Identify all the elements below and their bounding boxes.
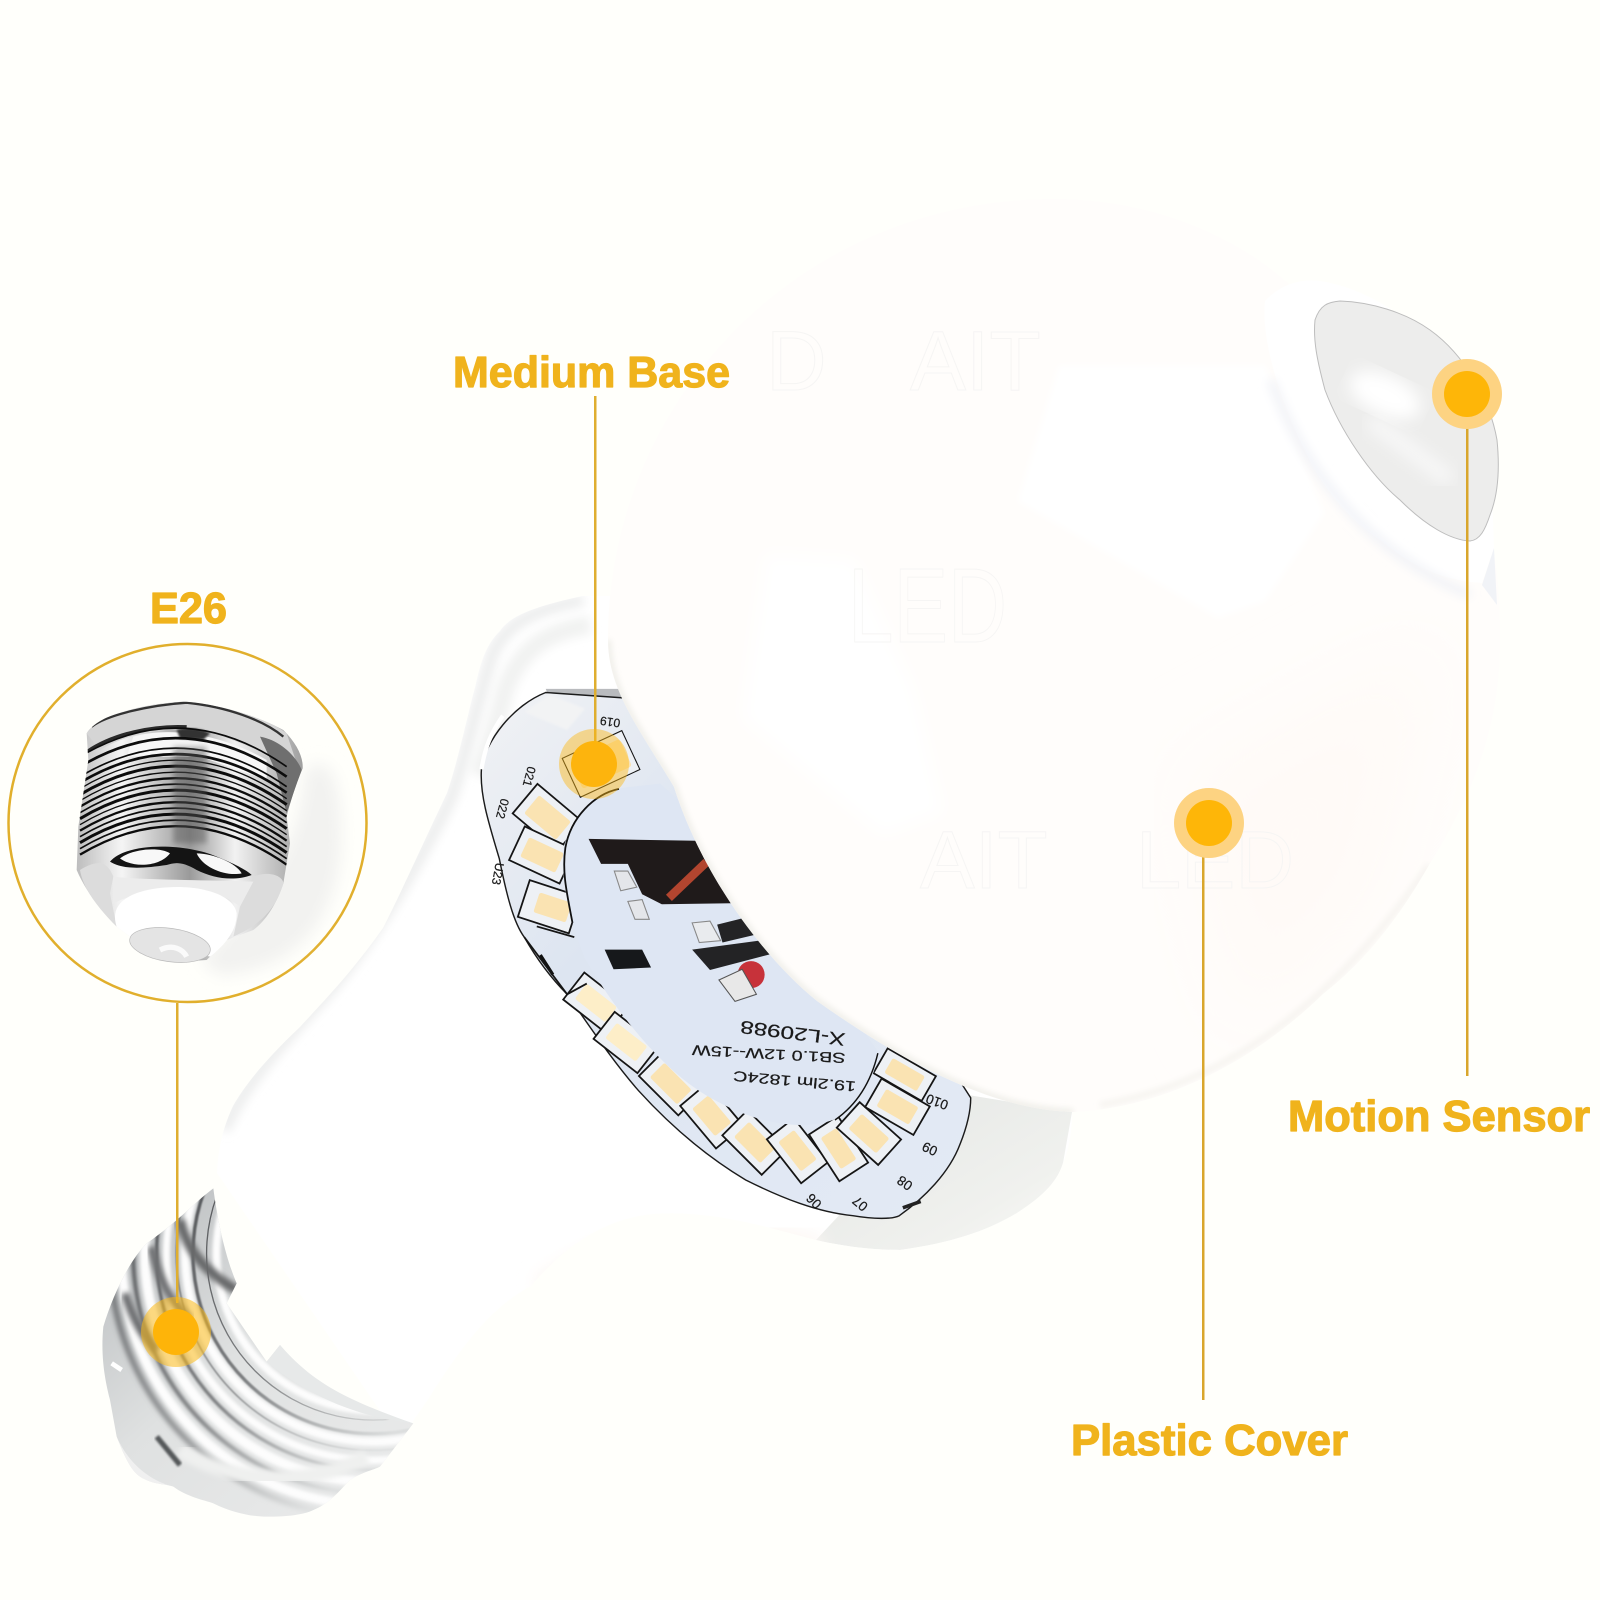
board printed labels: 08	[894, 1172, 915, 1193]
bulb body	[224, 597, 1072, 1250]
LED 5	[563, 973, 628, 1034]
LED 8	[680, 1083, 743, 1149]
E26 inset circle	[8, 644, 366, 1002]
leader line: Motion Sensor	[1466, 420, 1468, 1076]
motion sensor	[1264, 280, 1498, 605]
inset insulator	[115, 887, 237, 957]
board printed labels: 010	[923, 1091, 950, 1113]
dark grooves	[110, 1194, 409, 1510]
LED 7	[639, 1052, 703, 1115]
leader line: Plastic Cover	[1202, 850, 1204, 1400]
LED 10	[767, 1118, 828, 1183]
label: Motion Sensor: Motion Sensor	[1288, 1092, 1590, 1141]
label: E26: E26	[150, 584, 227, 633]
LED circuit board	[481, 689, 971, 1218]
LED 6	[594, 1012, 659, 1073]
plastic cover dome	[608, 332, 1426, 1112]
white ridges	[118, 1201, 404, 1505]
LED 14	[873, 1048, 936, 1101]
gray bar behind board top	[546, 689, 631, 707]
board printed labels: 06	[803, 1190, 825, 1212]
inset tip	[127, 923, 213, 967]
board printed labels: 019	[599, 713, 621, 730]
LED 13	[865, 1079, 930, 1135]
LED 3	[509, 826, 575, 884]
LED 11	[809, 1116, 868, 1181]
faint printed brand marks: AIT	[910, 314, 1041, 408]
board printed labels	[489, 713, 950, 1214]
LED ring	[509, 731, 936, 1183]
white facets	[1018, 366, 1324, 618]
LED 4	[518, 880, 581, 933]
board printed labels: 022	[493, 797, 512, 820]
board printed labels: X-L20988	[739, 1017, 846, 1049]
inset metal pockets	[110, 847, 252, 879]
sensor lens	[1314, 301, 1498, 541]
LED 9	[722, 1110, 787, 1175]
faint printed brand marks	[766, 314, 1294, 906]
faint printed brand marks: D	[766, 314, 827, 408]
board printed labels: SB1.0 12W--15W	[691, 1041, 846, 1065]
board inner disc	[563, 784, 878, 1125]
board printed labels: 09	[920, 1139, 940, 1159]
faint printed brand marks: LED	[1136, 815, 1294, 906]
marker dot: Medium Base	[559, 729, 629, 799]
LED 1	[562, 731, 640, 797]
board printed labels: U23	[489, 862, 507, 886]
leader line: E26	[176, 1003, 178, 1303]
board printed labels: 07	[850, 1193, 871, 1214]
LED 2	[513, 784, 582, 851]
board printed labels: 021	[520, 765, 538, 788]
wire cutouts	[589, 839, 774, 1001]
label: Medium Base: Medium Base	[453, 348, 730, 397]
faint printed brand marks: AIT	[920, 815, 1048, 906]
leader line: Medium Base	[594, 396, 596, 742]
inset thread lines	[80, 728, 287, 865]
marker dot: Motion Sensor	[1432, 359, 1502, 429]
inset metal screw cap	[77, 702, 303, 967]
board printed labels: 19.2lm 1824C	[733, 1067, 857, 1094]
metal screw base	[102, 1188, 413, 1516]
marker dot: E26	[141, 1297, 211, 1367]
LED 12	[837, 1102, 901, 1165]
faint printed brand marks: LED	[848, 547, 1007, 665]
sensor collar	[1264, 280, 1494, 583]
label: Plastic Cover: Plastic Cover	[1071, 1416, 1348, 1465]
marker dot: Plastic Cover	[1174, 788, 1244, 858]
